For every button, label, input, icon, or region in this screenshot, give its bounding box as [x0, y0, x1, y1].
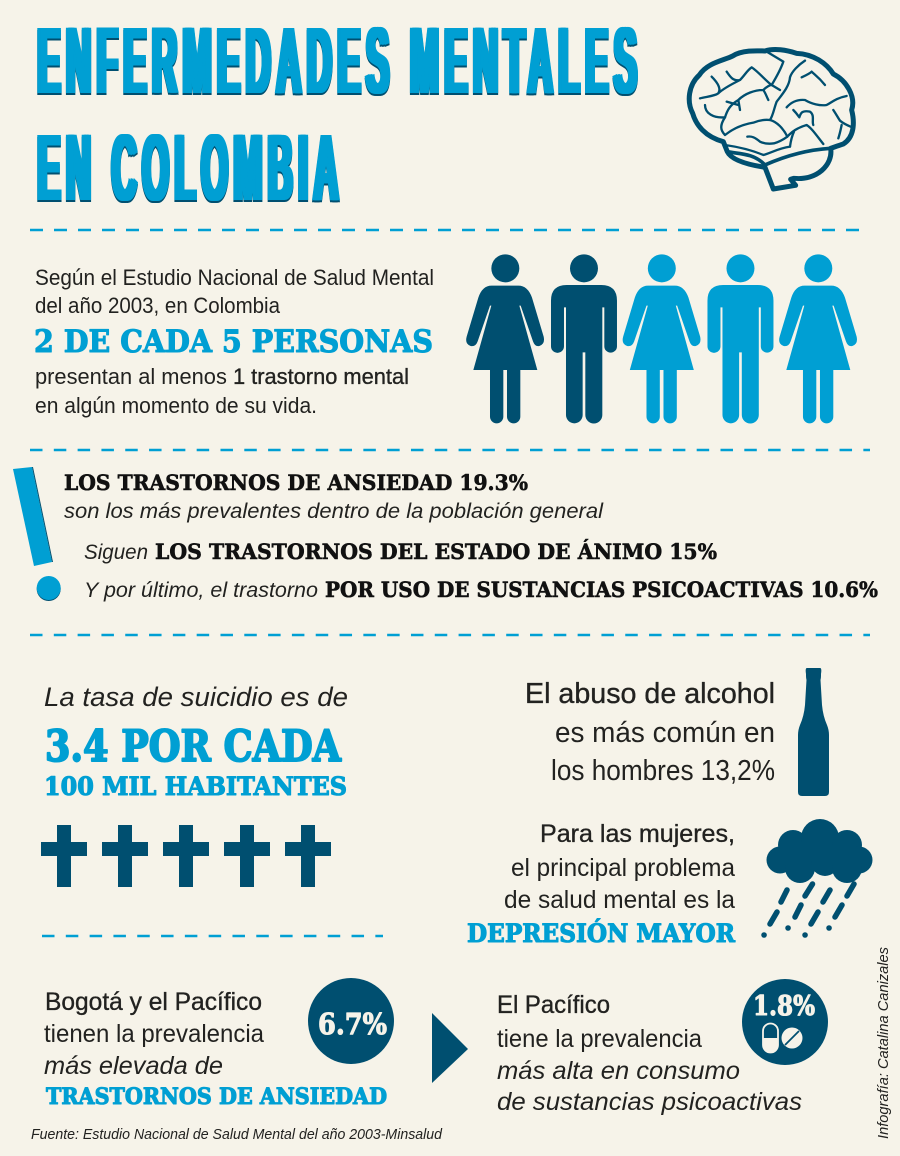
person: man dark: [551, 254, 617, 423]
text block: prevalence of disorders: Y por último, el trastorno: [84, 579, 318, 602]
icon: rain cloud: [764, 819, 872, 935]
text block: prevalence of disorders: son los más prevalentes dentro de la población general: [64, 499, 604, 523]
badge: 1.8% with pills: [742, 979, 828, 1065]
text block: prevalence of disorders: Siguen: [84, 541, 148, 564]
arrow: [432, 1013, 468, 1083]
text block: Bogotá and Pacific anxiety: Bogotá y el Pacífico: [45, 988, 262, 1016]
person: woman light: [623, 254, 701, 423]
divider: [30, 229, 860, 231]
text block: suicide rate: 100 MIL HABITANTES: [44, 772, 347, 801]
icon: five people: [466, 254, 857, 423]
text block: Bogotá and Pacific anxiety: más elevada de: [44, 1052, 223, 1080]
text block: study intro: presentan al menos 1 trastorno mental: [35, 364, 409, 389]
text block: Bogotá and Pacific anxiety: [44, 988, 387, 1110]
text block: Pacific substance use: El Pacífico: [497, 991, 610, 1019]
source note: Fuente: Estudio Nacional de Salud Mental del año 2003-Minsalud: [31, 1126, 443, 1143]
icon: capsule: [763, 1024, 778, 1053]
text block: prevalence of disorders: [64, 470, 878, 602]
text block: suicide rate: [44, 682, 348, 801]
title: [38, 8, 643, 221]
divider: [42, 935, 383, 937]
text block: alcohol abuse: es más común en: [555, 717, 775, 749]
text block: suicide rate: La tasa de suicidio es de: [44, 682, 348, 712]
text block: prevalence of disorders: POR USO DE SUSTANCIAS PSICOACTIVAS 10.6%: [325, 577, 878, 602]
title: EN COLOMBIA: [38, 115, 345, 221]
text block: women depression: [467, 820, 735, 948]
title: ENFERMEDADES MENTALES: [38, 8, 643, 114]
text block: Pacific substance use: más alta en consumo: [497, 1057, 740, 1085]
credit: Infografía: Catalina Canizales: [875, 947, 892, 1139]
text block: women depression: Para las mujeres,: [540, 820, 735, 848]
text block: Bogotá and Pacific anxiety: TRASTORNOS DE ANSIEDAD: [46, 1084, 387, 1110]
text block: study intro: [34, 265, 434, 418]
text block: prevalence of disorders: LOS TRASTORNOS DE ANSIEDAD 19.3%: [64, 470, 528, 495]
icon: five crosses: [41, 825, 331, 887]
text block: Pacific substance use: [497, 991, 802, 1116]
text block: Pacific substance use: tiene la prevalencia: [497, 1025, 702, 1053]
badge: 1.8% with pills: 1.8%: [753, 991, 815, 1022]
badge: 6.7%: [308, 978, 394, 1064]
text block: alcohol abuse: los hombres 13,2%: [551, 755, 775, 787]
person: man light: [707, 254, 773, 423]
text block: study intro: 2 DE CADA 5 PERSONAS: [34, 324, 433, 360]
text block: alcohol abuse: El abuso de alcohol: [525, 678, 775, 710]
text block: Pacific substance use: de sustancias psicoactivas: [497, 1088, 802, 1116]
icon: brain: [689, 50, 853, 189]
icon: tablet: [782, 1028, 802, 1048]
text block: women depression: DEPRESIÓN MAYOR: [467, 919, 735, 948]
divider: [30, 449, 870, 451]
text block: women depression: el principal problema: [511, 854, 735, 882]
text block: women depression: de salud mental es la: [504, 886, 735, 914]
icon: exclamation mark: [13, 467, 61, 601]
text block: suicide rate: 3.4 POR CADA: [45, 722, 342, 772]
person: woman light: [779, 254, 857, 423]
person: woman dark: [466, 254, 544, 423]
text block: prevalence of disorders: LOS TRASTORNOS DEL ESTADO DE ÁNIMO 15%: [155, 539, 717, 564]
text block: study intro: Según el Estudio Nacional de Salud Mental: [35, 265, 434, 290]
badge: 6.7%: 6.7%: [318, 1007, 387, 1041]
divider: [30, 634, 870, 636]
icon: bottle: [798, 668, 829, 796]
text block: Bogotá and Pacific anxiety: tienen la prevalencia: [44, 1020, 264, 1048]
text block: alcohol abuse: [525, 678, 775, 787]
text block: study intro: del año 2003, en Colombia: [35, 293, 281, 318]
text block: study intro: en algún momento de su vida.: [35, 393, 317, 418]
